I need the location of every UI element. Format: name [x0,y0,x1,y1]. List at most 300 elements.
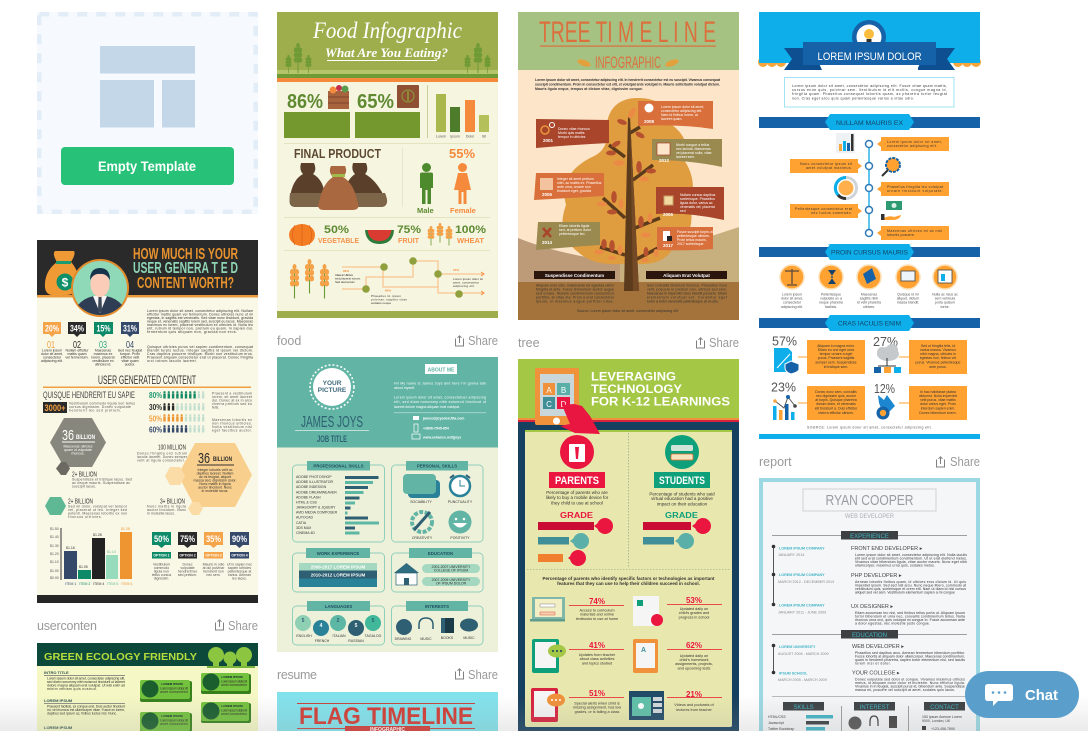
icons row: Pellentesque [821,292,841,296]
ribbon title: LOREM IPSUM DOLOR [818,51,922,63]
caption: food: Share [468,334,498,348]
about me [394,364,486,413]
icons row: massa blandit. [897,300,919,304]
icon: cloud network [874,344,901,373]
footer columns: sed ornare. Nullam condimentum consectetur [536,292,615,296]
button: empty template [61,147,234,185]
about me: Lorem ipsum dolor sit amet, consectetuer adipiscing [394,396,486,400]
timeline boxes: nec luctus commodo. [811,211,852,215]
header [518,12,739,70]
pictogram chart: Praesent a vestibulum [212,392,252,396]
footer columns: ipsum, in maximus augue porttitor vitae. [536,300,614,304]
name [803,489,936,520]
stats grid: 12% [874,381,895,396]
option tags: OPTION 4 [231,554,248,558]
about me: elit, sed diam nonummy nibh euismod tincidunt ut [394,400,486,404]
grade: students: GRADE [665,511,699,520]
section: experience: Aenean lobortis finibus quam, id ultrices eros dictum id. Ut quis [855,580,966,584]
section: education: lorem nisi et dolor. [855,662,891,666]
description: Percentage of parents who are [546,490,608,495]
header [277,12,498,82]
icons row: Quisque id mi [897,292,919,296]
pictogram chart: Nulla vestibulum nisl [212,425,252,429]
hexagon: 36 billion orange: Nunc mattis in ligula [199,482,231,486]
survey grid: missing assignment, has low [573,706,621,710]
icon: school [394,563,419,585]
stat: 2+ billion: ac neque mauris. Suspendisse ac [72,481,130,485]
food stats row [289,223,486,246]
section: education: Phasellus sed dapibus arcu. Aenean fermentum bibendum porttitor. [855,651,965,655]
picture placeholder: PICTURE [318,387,347,394]
title: TREE TI M E L I N E [539,16,716,49]
description: Percentage of students who said [649,492,715,496]
hexagon: 36 billion grey [50,418,106,475]
survey intro: features that they can use to help their children succeed in school. [557,581,700,586]
section: education: metus, id aliquam dolor dolor et molestie. Nunc efficitur ligula. [855,681,965,685]
icon: students [665,435,699,469]
title: USER GENERA T E D [133,260,238,277]
skills panel: ADOBE PHOTOSHOP [296,475,332,479]
icon: tablet with abc tiles: B [561,386,566,395]
option tags: OPTION 1 [153,554,170,558]
timeline callouts: ante urna, ornare non [557,185,591,189]
education panel [392,548,483,592]
timeline callouts: laoreet quam. [661,117,682,121]
timeline callouts: Morbi congue a tellus [676,143,710,147]
skills panel: CATIA [296,521,307,525]
hexagon: 36 billion orange: auctor tincidunt. Nunc [198,486,232,490]
icon: coin donut [835,177,856,199]
panel: user generated content template [37,240,258,603]
skills panel: ADOBE DREAMWEAVER [296,490,337,494]
survey grid: progress in school [679,616,710,620]
stat: second 2+ billion: potenti. Maecenas lobortis ex non [68,512,127,516]
section: contact: CONTACT [930,705,959,711]
title: TECHNOLOGY [591,382,682,396]
stat: second 2+ billion: Sed mi dolor, volutpat vel tempor [68,504,128,508]
bar chart: items: $1.10 [50,560,59,564]
section: interest [841,702,909,731]
section: experience: LOREM IPSUM COMPANY [779,604,825,608]
timeline boxes: Maecenas ultrices mi ac nisl [887,229,942,233]
stat tags 01-04: vel fermentum. [65,356,89,360]
footer columns: fringilla et ante. Fusce fermentum auctor augue [536,288,614,292]
timeline callouts: Donec vitae rhoncus [558,127,590,131]
icon: tablet with abc tiles: D [561,400,567,409]
heading: students: STUDENTS [659,475,705,487]
timeline boxes: Phasellus fringilla leo volutpat [887,185,943,189]
pictogram chart: lorem, sit amet laoreet [212,395,252,399]
timeline callouts: Lorem ipsum dolor sit amet, [661,105,704,109]
title: FLAG TIMELINE [299,703,473,730]
flow diagram: adipiscing elit. [453,284,475,288]
text block: intro: orci rutrum iaculis laoreet. [147,359,197,363]
icon: businessman portrait [71,259,129,317]
stats grid: tempor ornare a eget [820,352,852,356]
section: experience: FRONT END DEVELOPER ▸ [851,546,923,552]
stat tags 01-04: 31% [123,324,137,334]
icon: clock [450,475,470,496]
caption: tree: Share [709,336,739,350]
section: experience: EXPERIENCE [850,534,889,540]
ribbon title [784,20,955,70]
icon: tablet grade [633,639,658,673]
timeline boxes: consectetur adipiscing elit. [887,144,937,148]
title: CONTENT WORTH? [137,275,234,292]
stats grid: nibh magna, ultricies in [920,352,956,356]
bar chart: items: ITEM 2 [79,582,90,586]
timeline callouts: 2017 [663,243,674,248]
description: they child to use at school [551,500,603,506]
hexagon: 36 billion orange: ac mi feugiat, aliquet [199,475,231,479]
icons row: tortor. [941,305,950,309]
text block: intro: Lorem ipsum dolor sit amet, consectetur adipiscing elit, [47,676,125,680]
caption: userconten: Share [228,619,258,633]
timeline callouts: laoreet sem. [676,155,695,159]
contacts: james@joysdesUtta.com [422,416,464,420]
button: empty template: Empty Template [98,158,196,174]
section: skills: HTML/CSS [768,715,786,719]
header [518,359,739,422]
green callout cards: amet consectetur [160,722,189,726]
flow diagram: pulvinar, sagittis vitae [371,298,407,302]
languages panel: 5 [355,623,358,629]
stat tags 01-04: efficitur velit [121,356,139,360]
section: experience: Lorem ipsum dolor sit amet, consectetur adipiscing elit. Nulla iaculis [855,553,967,557]
pictogram chart [149,391,252,434]
stat: 2+ billion [72,470,132,488]
survey grid: and topics studied [582,662,612,666]
timeline callouts [534,101,724,250]
section: experience [772,531,967,626]
text block: intro: dolore magna aliquam erat volutpat. Ut wisi enim ad [47,684,125,688]
picture placeholder: YOUR [323,380,342,387]
survey grid: about class activities [580,657,615,661]
panel: empty template [37,12,258,214]
languages panel: 5 [372,618,375,624]
title: FOR K-12 LEARNINGS [591,394,730,408]
flow diagram [290,257,484,305]
stat: 3+ billion: Nunc mattis in ligula [147,504,186,508]
tree illustration [562,98,693,291]
skills panel [292,461,384,542]
education panel: EDUCATION [428,551,453,556]
bar chart: Ipsum [450,134,460,138]
hexagon: 36 billion grey: rhoncus. [71,452,85,456]
stat: 3+ billion: auctor tincidunt. Nunc [147,508,186,512]
stat: 2+ billion: 2+ BILLION [72,470,97,478]
section: experience: Vivamus vitae bibendum ligula, vitae auctor mauris. Nunc eget nibh [855,560,967,564]
caption: report: report [759,455,792,469]
footer columns: Aliquam Erat Volutpat [663,273,710,278]
icons row: adipiscing elit. [781,305,803,309]
option tags: sed pretium. [178,573,197,577]
icons row: consectetur [783,300,802,304]
stat tags 01-04: 34% [70,324,84,334]
survey grid: grades, or is failing a class [575,710,619,714]
personal skills panel: PUNCTUALITY [448,500,473,504]
option tags: OPTION 2 [179,554,196,558]
timeline callouts: ligula dolor, varius ac [680,201,713,205]
stats grid: elit tincidunt a. Duis efficitur [815,406,858,410]
section: education: YOUR COLLEGE ▸ [852,670,900,676]
text block: quisque: 3000+ [44,403,66,413]
stat: male female: Male [417,206,434,215]
stat: 3+ billion [147,496,186,516]
option tags: Vestibulum [153,562,170,566]
flow diagram: Phasellus id, ipsum [371,294,402,298]
languages panel: 5 [302,618,305,624]
icon: tablet with abc tiles [535,368,579,425]
intro text: Mauris ligula neque, tempus at dictum vitae, dignissim congue. [535,87,643,91]
stat: 100 million [137,442,188,462]
green callout cards: Lorem ipsum dolor sit [221,680,247,684]
section: skills: SKILLS [793,705,814,711]
survey grid: child's grades and [679,611,709,615]
section: education: EDUCATION [852,633,887,639]
text block: intro: LOREM IPSUM [44,725,73,730]
stat tags 01-04: Maecenas [95,348,111,352]
stats grid: dictum diam, et venenatis [816,402,856,406]
education panel: OF IPSUM DOLOR [436,582,467,586]
hexagon: 36 billion orange: dapibus laoreet. Nullam [197,472,233,476]
about me: laoreet dolore magna aliquam erat volutpat. [394,405,460,409]
hexagon: 36 billion orange: in molestie lacus. [202,489,228,493]
icon: smile [448,510,472,534]
header [277,357,498,448]
text block: intro: LOREM IPSUM [44,698,73,703]
languages panel: LANGUAGES [325,604,352,609]
hexagon: 36 billion orange: massa sed, dignissim dolor. [194,478,237,482]
languages panel: ITALIAN [333,634,346,638]
hexagon: 36 billion orange: BILLION [213,456,232,463]
text block: intro: mi, vel rhoncus est ullamcorper vitae. Fusce ex lorem, [47,708,125,712]
bar chart: items [50,527,132,586]
languages panel: 2 [337,618,340,624]
name: WEB DEVELOPER [845,513,894,520]
text block: intro: elit, rutrum id tempor non, pretium eu quam. In sapien dui, [147,326,253,330]
icons row [780,265,958,309]
section: skills: Twitter Bootstrap [768,727,794,731]
section: experience: JANUARY 2011 - JUNE 2009 [778,610,826,614]
icon: chat [403,474,440,498]
timeline callouts: 2017 scelerisque. [677,242,704,246]
title [539,16,716,72]
personal skills panel: CREATIVITY [412,536,433,540]
stats grid: dolor varius eget. Proin [920,402,956,406]
footer [759,434,980,439]
timeline callouts: 2001 [543,138,554,143]
stat tags 01-04: consectetur [43,356,62,360]
bar chart: items: ITEM 4 [93,582,104,586]
option tags: commodo [154,566,169,570]
stat tags 01-04: mattis quam [67,352,87,356]
hexagon: 36 billion grey: BILLION [76,434,95,441]
interests panel: MUSIC [463,636,475,640]
bar chart: items: $1.50 [50,527,59,531]
food stats row: VEGETABLE [318,236,359,245]
text block: intro: egestas, in sagittis est venenatis. Sed vitae nunc tincidunt, gravida [147,316,253,320]
contacts: www.sehance.net/jjoys [422,436,461,440]
icon: tablet alert [531,688,565,722]
header [758,12,981,67]
stats grid: viverra efficitur ultrices. [818,411,854,415]
flow diagram: Class in Ultrices [335,273,354,277]
icon: video [629,691,664,720]
timeline callouts: tincidunt eget, gravida [557,189,591,193]
food stats row: 75% [397,224,421,236]
timeline callouts: Morbi quis mattis [558,131,585,135]
bar chart: items: ITEM 5 [107,582,118,586]
caption: resume: Share [468,668,498,682]
banner: proin cursus mauris [759,244,980,260]
banner: cras iaculis enim: CRAS IACULIS ENIM [838,320,901,328]
timeline callouts: pellentesque ultrices. [677,234,710,238]
stat: percentages [284,85,420,138]
section: experience: Etiam accumsan leo nisi, sed finibus tellus porta ut. Aliquam ipsum [855,611,965,615]
grade: students [643,511,711,549]
footer columns: Suspendisse Condimentum [545,273,604,278]
option tags: 75% [180,534,195,544]
pictogram chart: non rhoncus ultricies. [212,422,252,426]
option tags: nec sem. [206,573,221,577]
timeline boxes: amet volutpat maximus. [806,166,852,170]
title: Food Infographic [312,18,462,43]
text block: intro: Cras dapibus posuere tristique. Morbi non vestibulum eros. [147,352,253,356]
box edge [828,244,911,245]
stat: 2+ billion: Suspendisse et tristique lacus. Sed [72,478,132,482]
heading: parents [549,472,605,488]
skills panel: PROFESSIONAL SKILLS [313,464,364,468]
footer columns [534,271,727,313]
grade: parents [538,511,613,566]
stats grid: 27% [873,334,898,349]
option tags: Ut in sapien nec [227,562,252,566]
description: impact on their education [657,502,708,506]
survey grid: Updated daily on [680,654,708,658]
text block: intro: INTRO TITLE [44,670,69,675]
section: experience: JANUARY 2014 [778,553,804,557]
intro box: Lorem ipsum dolor sit amet, consectetur adipiscing elit. Fusce vitae quam mattis, [792,84,947,88]
timeline callouts: Integer sit amet pretium [557,177,594,181]
text block: quisque: QUISQUE HENDRERIT EU SAPIE [43,390,135,400]
skills panel: HTML & CSS [296,500,318,504]
stats grid: nec dignissim quis, auctor [816,394,857,398]
stats grid [759,334,980,439]
icon: document [633,596,663,626]
header band [37,240,258,298]
stat tags 01-04: 02 [73,340,81,351]
title: LEVERAGING [591,370,676,384]
about me: ABOUT ME [428,368,455,374]
footer [277,311,498,318]
icon: light bulb trees [207,647,255,668]
icon: money bag [45,251,78,295]
green callout cards: amet consectetur [221,683,248,687]
icon: tablet chat [532,639,566,673]
title [312,18,462,61]
timeline callouts: 2006 [663,212,674,217]
timeline boxes: Nunc consectetur ipsum sit [800,162,852,166]
bar chart: items: $1.40 [50,535,59,539]
languages panel [292,601,384,645]
pictogram chart: Maecenas lobortis ex [212,418,252,422]
stat tags 01-04: Sed nec feugiat [118,348,142,352]
option tags: 35% [206,534,221,544]
icon: tablet with abc tiles: A [546,386,552,395]
text block: intro: fermentum quis aliquam non, gravida non eros. [147,330,237,334]
timeline callouts: sed, at pretium dolor [559,228,592,232]
name: JOB TITLE [317,434,347,444]
option tags: dignissim. [154,576,169,580]
chat button: Chat [1025,687,1058,704]
survey grid: 74% [589,597,605,606]
flow diagram: Lorem ipsum dolor sit [453,277,483,281]
flow diagram: 15% [453,268,459,272]
stats grid: Etiam eu orci eget urna [818,348,854,352]
text block: quisque: cursus dignissim. Donec vulputate [69,405,131,409]
timeline callouts: vel placerat nulla, vitae [676,151,712,155]
survey grid: Special alerts when child is [574,702,620,706]
timeline boxes: ornare tincidunt vulputate. [887,189,943,193]
section: education: WEB DEVELOPER ▸ [852,644,904,650]
flow diagram: sodales neque [371,301,391,305]
caption: resume: resume [277,668,317,682]
section: experience: rhoncus urna orci, quis volutpat mi congue in. Fusce accumsan ante [855,618,965,622]
name: JAMES JOYS [301,414,363,431]
section: skills: Javascript [768,721,784,725]
timeline callouts: sed [680,209,686,213]
stat: 100 million: iaculis laoreet. Donec semper [137,455,188,459]
survey grid: Access to curriculum [579,608,615,612]
stat tags 01-04: 15% [96,324,110,334]
icon: bar chart [836,133,855,153]
survey grid: and upcoming tests [678,666,711,670]
text block: intro: Praesent facilisis, ex congue erat. Duis auctor tincidunt [47,704,125,708]
icon: sacks [290,163,387,210]
section: experience: LOREM IPSUM COMPANY [779,546,825,550]
timeline callouts: Fusce suscipit turpis ut [677,230,713,234]
section: experience: a dolor egestas, nec molestie justo congue. [855,622,930,626]
icons row: facilisis. [825,305,837,309]
caption: report: Share [950,455,980,469]
timeline callouts: 2008 [644,119,655,124]
chat button [965,671,1079,718]
title: INFOGRAPHIC [595,53,661,72]
stat tags 01-04: adipiscing elit. [41,359,63,363]
stat tags 01-04: 03 [99,340,107,351]
bar chart [427,85,489,138]
footer columns: Sed convallis tincidunt rhoncus. Phasellus risus [647,284,727,288]
text block: intro: blandit turpis luctus. Integer sagittis id ipsum vel dictum. [147,348,253,352]
panel: ryan cooper resume template [761,480,978,731]
text block: quisque [43,390,135,413]
stats grid: velit purus, vitae mattis [920,398,956,402]
survey grid: 62% [686,641,702,650]
green callout cards: amet consectetur [160,690,189,694]
hexagon: 36 billion orange: 36 [198,450,210,467]
panel: green ecology template [37,643,258,731]
heading: final product: FINAL PRODUCT [294,147,381,161]
education panel: 2001-2007 UNIVERSITY [432,565,471,569]
stat: 2+ billion: suscipit lacus. [72,484,96,488]
title [591,370,730,408]
option tags: vulputate [180,566,195,570]
section: experience: elit sed erat condimentum condimentum. Ut ut erat eleifend metus. [855,556,967,560]
icons row: ultrices. [863,305,875,309]
personal skills panel: SOCIABILITY [410,500,432,504]
title: GREEN ECOLOGY FRIENDLY [44,651,197,663]
